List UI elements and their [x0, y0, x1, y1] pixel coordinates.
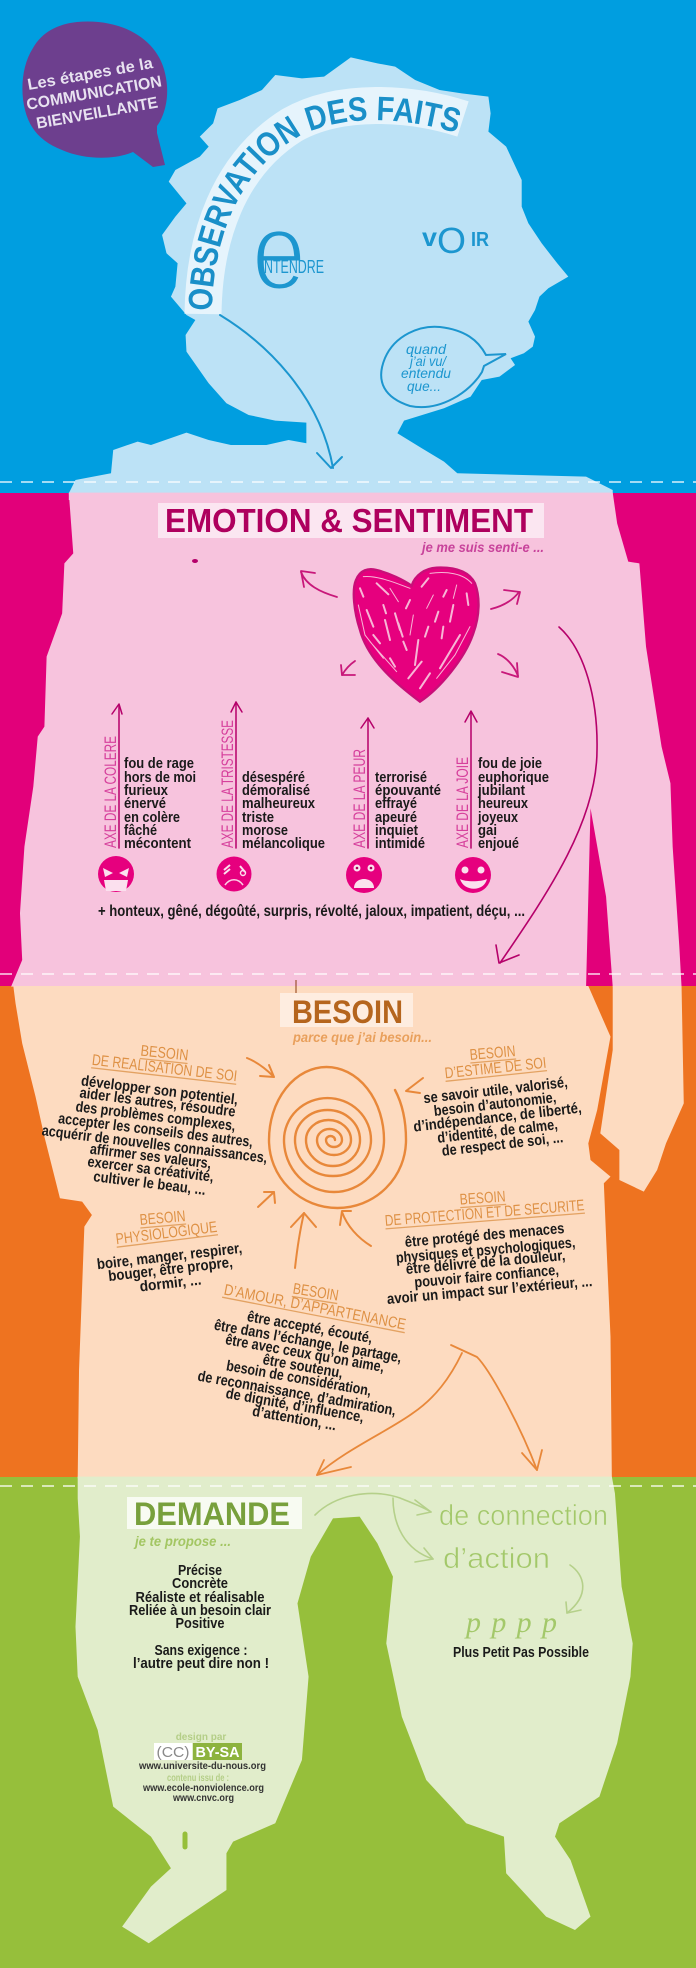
legs silhouette — [75, 1477, 633, 1943]
arrow: heart bottom left — [341, 661, 355, 675]
heading: observation des faits arc: OBSERVATION DES FAITS — [188, 96, 460, 310]
axis: peur: AXE DE LA PEUR — [351, 749, 369, 848]
callout: purple speech bubble title: COMMUNICATION — [25, 73, 163, 114]
word list: joie: gai — [478, 822, 497, 839]
word list: colere: énervé — [124, 795, 166, 812]
block: estime de soi: d’identité, de calme, — [436, 1116, 559, 1147]
credits: www.ecole-nonviolence.org — [142, 1782, 264, 1794]
arm silhouette — [600, 986, 684, 1192]
text: other feelings: + honteux, gêné, dégoûté, surpris, révolté, jaloux, impatient, déçu, ... — [98, 903, 525, 920]
speech bubble: quand j'ai vu: j’ai vu/ — [408, 353, 448, 369]
axis: colere: AXE DE LA COLERE — [102, 736, 120, 848]
text: voir: v — [422, 222, 438, 252]
block: protection et securite: avoir un impact sur l’extérieur, ... — [386, 1273, 593, 1308]
axis: joie: AXE DE LA JOIE — [454, 757, 472, 848]
block: amour et appartenance — [196, 1281, 407, 1434]
heading: emotion et sentiment: EMOTION & SENTIMENT — [165, 502, 533, 539]
block: realisation de soi: développer son potentiel, — [80, 1072, 239, 1109]
panel: pink background — [0, 493, 696, 986]
block: estime de soi: besoin d’autonomie, — [433, 1089, 557, 1120]
block: realisation de soi: BESOIN — [140, 1043, 189, 1064]
arrow: besoin to demande branches — [317, 1345, 542, 1475]
block: estime de soi — [413, 1043, 582, 1160]
block: realisation de soi: DE REALISATION DE SOI — [91, 1052, 238, 1085]
arrow: amour to spiral — [291, 1213, 316, 1268]
head silhouette — [69, 57, 613, 500]
word list: peur: effrayé — [375, 795, 417, 812]
text: demande criteria: Concrète — [172, 1575, 228, 1592]
torso silhouette: besoin — [13, 986, 612, 1478]
block: physiologique — [96, 1208, 243, 1295]
heading: besoin: BESOIN — [292, 994, 403, 1030]
speech bubble: quand j'ai vu: quand — [406, 341, 447, 357]
arrow: demande to connection — [315, 1493, 431, 1515]
block: amour et appartenance: BESOIN — [292, 1281, 340, 1305]
credits: www.cnvc.org — [172, 1792, 234, 1804]
arrow: protection to spiral — [340, 1211, 371, 1246]
block: amour et appartenance: être soutenu, — [261, 1351, 344, 1382]
block: amour et appartenance: être accepté, écouté, — [246, 1308, 374, 1347]
arrow: emotion to besoin — [496, 627, 597, 963]
block: amour et appartenance: de dignité, d’influence, — [224, 1385, 365, 1426]
word list: peur: intimidé — [375, 835, 425, 852]
block: physiologique: boire, manger, respirer, — [96, 1240, 243, 1273]
text: demande criteria: l’autre peut dire non ! — [133, 1655, 269, 1672]
block: physiologique: dormir, ... — [139, 1272, 202, 1295]
block: physiologique: PHYSIOLOGIQUE — [115, 1219, 218, 1248]
icon: sad face — [216, 856, 252, 892]
arrow: physiologique to spiral — [258, 1192, 275, 1207]
word list: tristesse: mélancolique — [242, 835, 325, 852]
callout: purple speech bubble title — [22, 21, 167, 167]
block: protection et securite — [384, 1188, 593, 1308]
text: voir: O — [437, 220, 466, 261]
panel: orange background — [0, 986, 696, 1477]
mark: stray ink — [192, 559, 198, 563]
text: pppp: pppp — [464, 1606, 557, 1639]
block: amour et appartenance: de reconnaissance, d’admiration, — [196, 1368, 397, 1419]
block: realisation de soi: cultiver le beau, ... — [92, 1168, 207, 1199]
block: amour et appartenance: être dans l’échange, le partage, — [213, 1317, 403, 1366]
word list: peur: terrorisé — [375, 769, 427, 786]
credits: (CC) — [156, 1744, 190, 1761]
text: de connection: de connection — [439, 1500, 608, 1532]
text: demande criteria: Réaliste et réalisable — [136, 1589, 264, 1606]
word list: colere: hors de moi — [124, 769, 196, 786]
text: demande criteria: Positive — [176, 1615, 224, 1632]
subheading: je te propose: je te propose ... — [133, 1533, 231, 1549]
icon: fear face — [346, 857, 382, 893]
word list: joie: enjoué — [478, 835, 519, 852]
heading: demande: DEMANDE — [134, 1496, 290, 1532]
block: amour et appartenance: d’attention, ... — [251, 1403, 338, 1434]
panel: green background — [0, 1477, 696, 1968]
block: protection et securite: BESOIN — [459, 1188, 506, 1209]
block: amour et appartenance: besoin de considération, — [225, 1357, 373, 1400]
callout: purple speech bubble title: BIENVEILLANTE — [35, 94, 160, 133]
arrow: observation to emotion — [220, 315, 342, 468]
word list: joie: jubilant — [477, 782, 525, 799]
word list: colere: fou de rage — [124, 755, 194, 772]
block: amour et appartenance: être avec ceux qu’on aime, — [224, 1331, 386, 1376]
speech bubble: quand j'ai vu — [381, 327, 506, 407]
block: realisation de soi: accepter les conseils des autres, — [57, 1110, 254, 1151]
text: voir — [422, 220, 490, 261]
word list: joie: heureux — [478, 795, 529, 812]
block: realisation de soi: exercer sa créativité, — [86, 1153, 215, 1186]
block: physiologique: bouger, être propre, — [107, 1254, 234, 1285]
credits — [138, 1732, 266, 1804]
block: protection et securite: physiques et psychologiques, — [395, 1234, 576, 1267]
arrow: demande to action — [393, 1498, 433, 1562]
word list: colere — [124, 755, 196, 852]
block: protection et securite: pouvoir faire confiance, — [414, 1262, 560, 1291]
word list: tristesse: triste — [242, 809, 274, 826]
arrow: heart top right — [491, 590, 520, 609]
text: demande criteria: Sans exigence : — [154, 1642, 248, 1659]
icon: angry face — [98, 856, 134, 892]
icon: spiral — [269, 1067, 406, 1208]
arrow: realisation to spiral — [247, 1058, 274, 1077]
arrow: estime to spiral — [406, 1078, 423, 1093]
credits: design par — [176, 1732, 226, 1743]
block: amour et appartenance: D’AMOUR, D’APPARTENANCE — [222, 1282, 407, 1334]
block: protection et securite: être délivré de la douleur, — [405, 1247, 566, 1278]
word list: joie: fou de joie — [478, 755, 542, 772]
word list: tristesse: démoralisé — [242, 782, 310, 799]
word list: joie: joyeux — [477, 809, 519, 826]
torso silhouette: emotion — [11, 493, 682, 987]
word list: joie: euphorique — [478, 769, 549, 786]
arrow: heart top left — [301, 571, 337, 597]
block: realisation de soi: des problèmes complexes, — [75, 1098, 236, 1135]
text: demande criteria: Reliée à un besoin clair — [129, 1602, 271, 1619]
icon: joy face — [455, 857, 491, 893]
callout: purple speech bubble title: Les étapes de la — [26, 55, 154, 94]
word list: tristesse: morose — [242, 822, 288, 839]
word list: peur: apeuré — [375, 809, 417, 826]
subheading: je me suis senti-e: je me suis senti-e ... — [420, 540, 544, 555]
word list: peur: épouvanté — [375, 782, 441, 799]
text: demande criteria: Précise — [178, 1562, 222, 1579]
block: estime de soi: de respect de soi, ... — [441, 1129, 564, 1160]
word list: peur: inquiet — [375, 822, 418, 839]
word list: peur — [375, 769, 441, 852]
credits: www.universite-du-nous.org — [138, 1760, 266, 1772]
block: realisation de soi — [41, 1043, 268, 1199]
block: protection et securite: être protégé des menaces — [404, 1220, 565, 1251]
word list: tristesse: malheureux — [242, 795, 316, 812]
word list: colere: furieux — [124, 782, 169, 799]
speech bubble: quand j'ai vu: que... — [407, 378, 441, 394]
arrow: action to pppp — [566, 1565, 583, 1613]
block: realisation de soi: affirmer ses valeurs, — [89, 1141, 212, 1172]
credits: BY-SA — [196, 1744, 240, 1761]
word list: colere: mécontent — [124, 835, 191, 852]
text: voir: IR — [471, 229, 490, 251]
block: estime de soi: D’ESTIME DE SOI — [444, 1055, 547, 1082]
credits: contenu issu de : — [167, 1773, 229, 1784]
mark: small green dash — [182, 1834, 188, 1847]
text: demande criteria — [129, 1562, 271, 1672]
text: plus petit pas possible: Plus Petit Pas Possible — [453, 1644, 589, 1661]
arrow: heart bottom right — [498, 654, 518, 677]
text: entendre: NTENDRE — [264, 257, 324, 277]
axis: tristesse: AXE DE LA TRISTESSE — [219, 720, 237, 848]
text: entendre: e — [252, 189, 306, 312]
word list: joie — [477, 755, 549, 852]
text: d'action: d’action — [443, 1543, 550, 1575]
block: realisation de soi: acquérir de nouvelles connaissances, — [41, 1122, 268, 1167]
speech bubble: quand j'ai vu: entendu — [401, 365, 451, 381]
block: estime de soi: BESOIN — [469, 1043, 516, 1064]
subheading: parce que j'ai besoin: parce que j’ai besoin... — [292, 1029, 432, 1045]
word list: colere: en colère — [124, 809, 180, 826]
block: protection et securite: DE PROTECTION ET DE SECURITE — [384, 1197, 585, 1230]
panel: blue background — [0, 0, 696, 493]
axis: tristesse — [219, 702, 242, 848]
block: estime de soi: d’indépendance, de liberté, — [413, 1100, 582, 1136]
word list: tristesse — [242, 769, 325, 852]
word list: tristesse: désespéré — [242, 769, 305, 786]
block: estime de soi: se savoir utile, valorisé, — [422, 1074, 568, 1107]
word list: colere: fâché — [124, 822, 157, 839]
icon: scribbled heart — [354, 568, 479, 702]
block: physiologique: BESOIN — [139, 1208, 186, 1229]
block: realisation de soi: aider les autres, résoudre — [79, 1085, 236, 1121]
